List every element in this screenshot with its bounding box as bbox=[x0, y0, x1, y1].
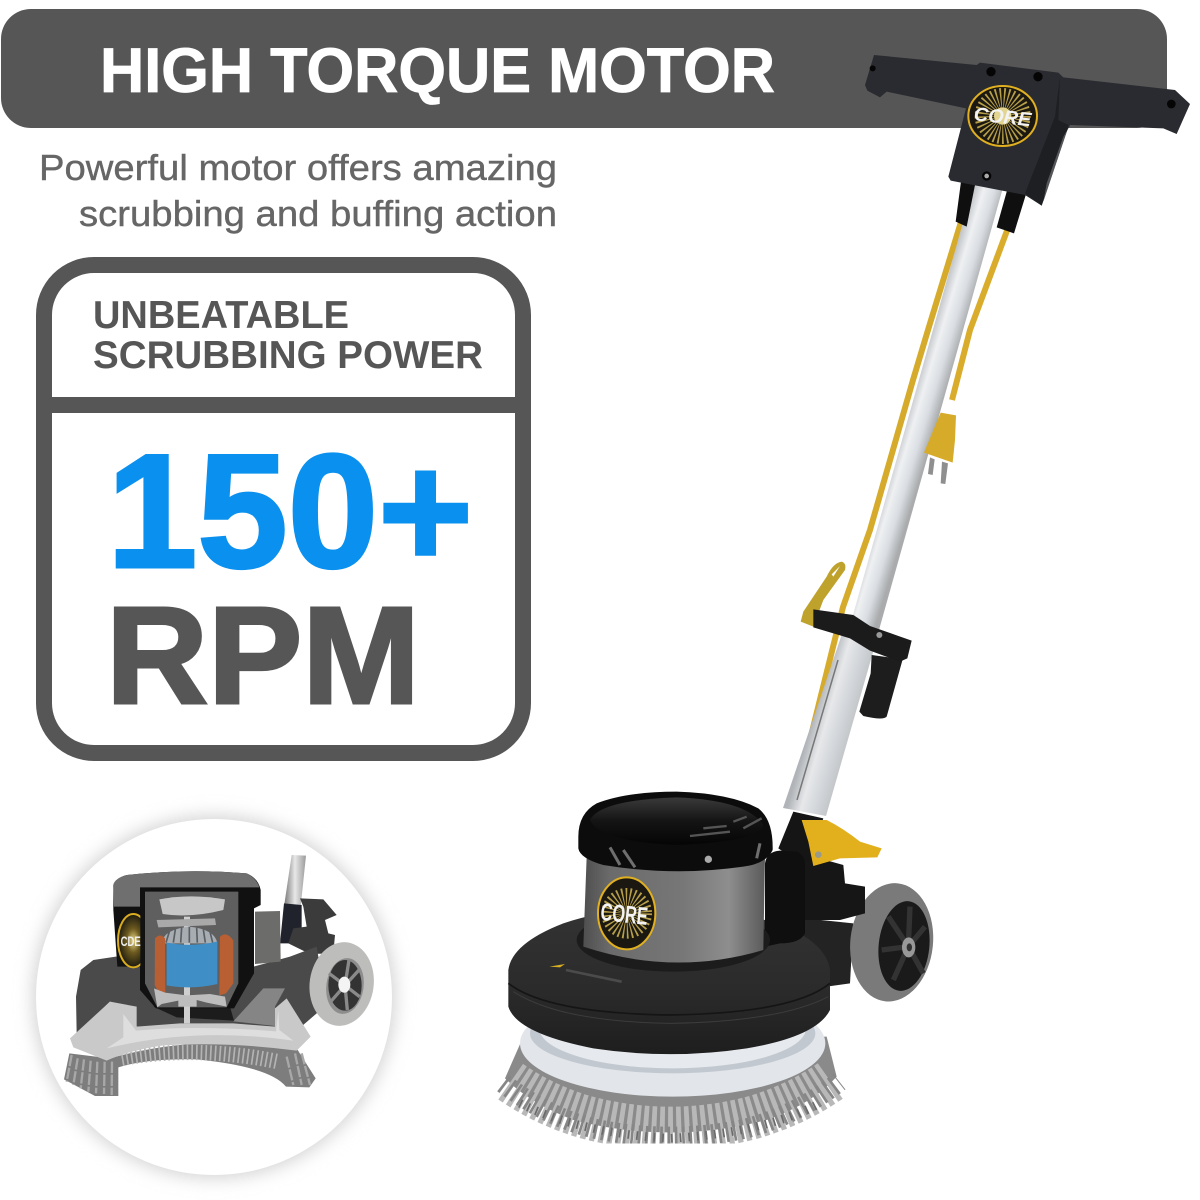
cutaway blue rotor bbox=[167, 942, 217, 987]
stat value: 150+ bbox=[107, 421, 473, 602]
cutaway fan bbox=[159, 896, 225, 915]
cutaway deck bbox=[76, 947, 325, 1034]
clamp lever handle bbox=[859, 655, 903, 719]
motor lid bbox=[578, 792, 773, 871]
clamp block bbox=[813, 609, 912, 662]
pedal bracket bbox=[802, 853, 865, 920]
deck grooves bbox=[508, 983, 830, 1015]
deck bbox=[508, 908, 830, 1054]
handle logo bbox=[968, 86, 1037, 146]
cutaway handle rod bbox=[284, 855, 306, 907]
plug prongs bbox=[928, 457, 948, 484]
motor seat bbox=[577, 908, 770, 972]
handle logo: CORE bbox=[973, 104, 1033, 131]
cutaway outer housing bbox=[113, 871, 261, 1008]
white brush plate bbox=[520, 990, 825, 1097]
lower handle tube bbox=[783, 625, 878, 816]
motor housing bbox=[583, 857, 765, 963]
housing logo: CORE bbox=[599, 899, 649, 931]
inset circle bbox=[36, 819, 392, 1175]
wheel tire bbox=[844, 879, 939, 1006]
cutaway left copper winding bbox=[155, 935, 165, 995]
scrubber base bbox=[503, 792, 939, 1138]
power cord right strand bbox=[952, 228, 1008, 400]
plug body bbox=[924, 413, 956, 463]
cutaway lower bearing bbox=[154, 988, 227, 1007]
plug bbox=[924, 413, 956, 484]
title: HIGH TORQUE MOTOR bbox=[100, 36, 775, 106]
tube socket bbox=[778, 812, 823, 863]
cutaway right copper winding bbox=[219, 934, 233, 995]
brush bristles bbox=[503, 1037, 839, 1138]
tube sockets bbox=[956, 177, 1028, 233]
cutaway rear block bbox=[255, 911, 281, 964]
panel heading bbox=[93, 294, 483, 377]
handle collar bbox=[801, 562, 912, 719]
cutaway shaft bbox=[184, 917, 190, 1023]
cutaway rear bracket bbox=[288, 898, 337, 954]
subtitle bbox=[39, 147, 557, 234]
panel heading: SCRUBBING POWER bbox=[93, 334, 483, 377]
machine: floor scrubber bbox=[503, 55, 1190, 1138]
cutaway rotor top bbox=[162, 927, 217, 943]
cutaway machine bbox=[64, 855, 379, 1096]
wheel hub bbox=[874, 899, 934, 993]
handle head side shade bbox=[1025, 77, 1068, 206]
cutaway dark shaft seat bbox=[153, 1007, 234, 1021]
cutaway bristles bbox=[64, 1043, 316, 1096]
handle screw holes bbox=[870, 65, 1176, 181]
panel heading: UNBEATABLE bbox=[93, 294, 349, 337]
inset circle shadow bbox=[33, 816, 395, 1178]
cutaway wheel bbox=[304, 938, 379, 1030]
panel divider bbox=[44, 397, 523, 413]
housing logo bbox=[598, 877, 655, 949]
cutaway logo: CDE bbox=[121, 933, 141, 949]
power cord left strand bbox=[810, 222, 961, 740]
subtitle: Powerful motor offers amazing bbox=[39, 147, 557, 188]
inset: motor cutaway bbox=[33, 816, 395, 1178]
cutaway rod sleeve bbox=[280, 903, 302, 943]
title banner bbox=[1, 9, 1167, 128]
cutaway brush plate bbox=[70, 998, 311, 1061]
rear wheel bbox=[788, 879, 939, 1006]
deck brand mark bbox=[549, 964, 565, 967]
cutaway motor cavity bbox=[145, 892, 238, 1007]
cutaway logo bbox=[118, 910, 150, 970]
plate inner ring bbox=[530, 993, 815, 1073]
stat unit: RPM bbox=[106, 579, 420, 733]
release lever bbox=[801, 562, 845, 627]
handle grips and head bbox=[865, 55, 1190, 206]
panel frame bbox=[44, 265, 523, 753]
upper handle tube bbox=[851, 176, 1004, 630]
cutaway plate bbox=[157, 918, 216, 927]
subtitle: scrubbing and buffing action bbox=[79, 193, 557, 234]
T-handle bbox=[865, 55, 1190, 233]
cutaway plate inner grey bbox=[233, 988, 285, 1026]
yellow pedal bbox=[802, 820, 882, 866]
motor side housing bbox=[765, 851, 805, 947]
panel: scrubbing power stat bbox=[44, 265, 523, 753]
